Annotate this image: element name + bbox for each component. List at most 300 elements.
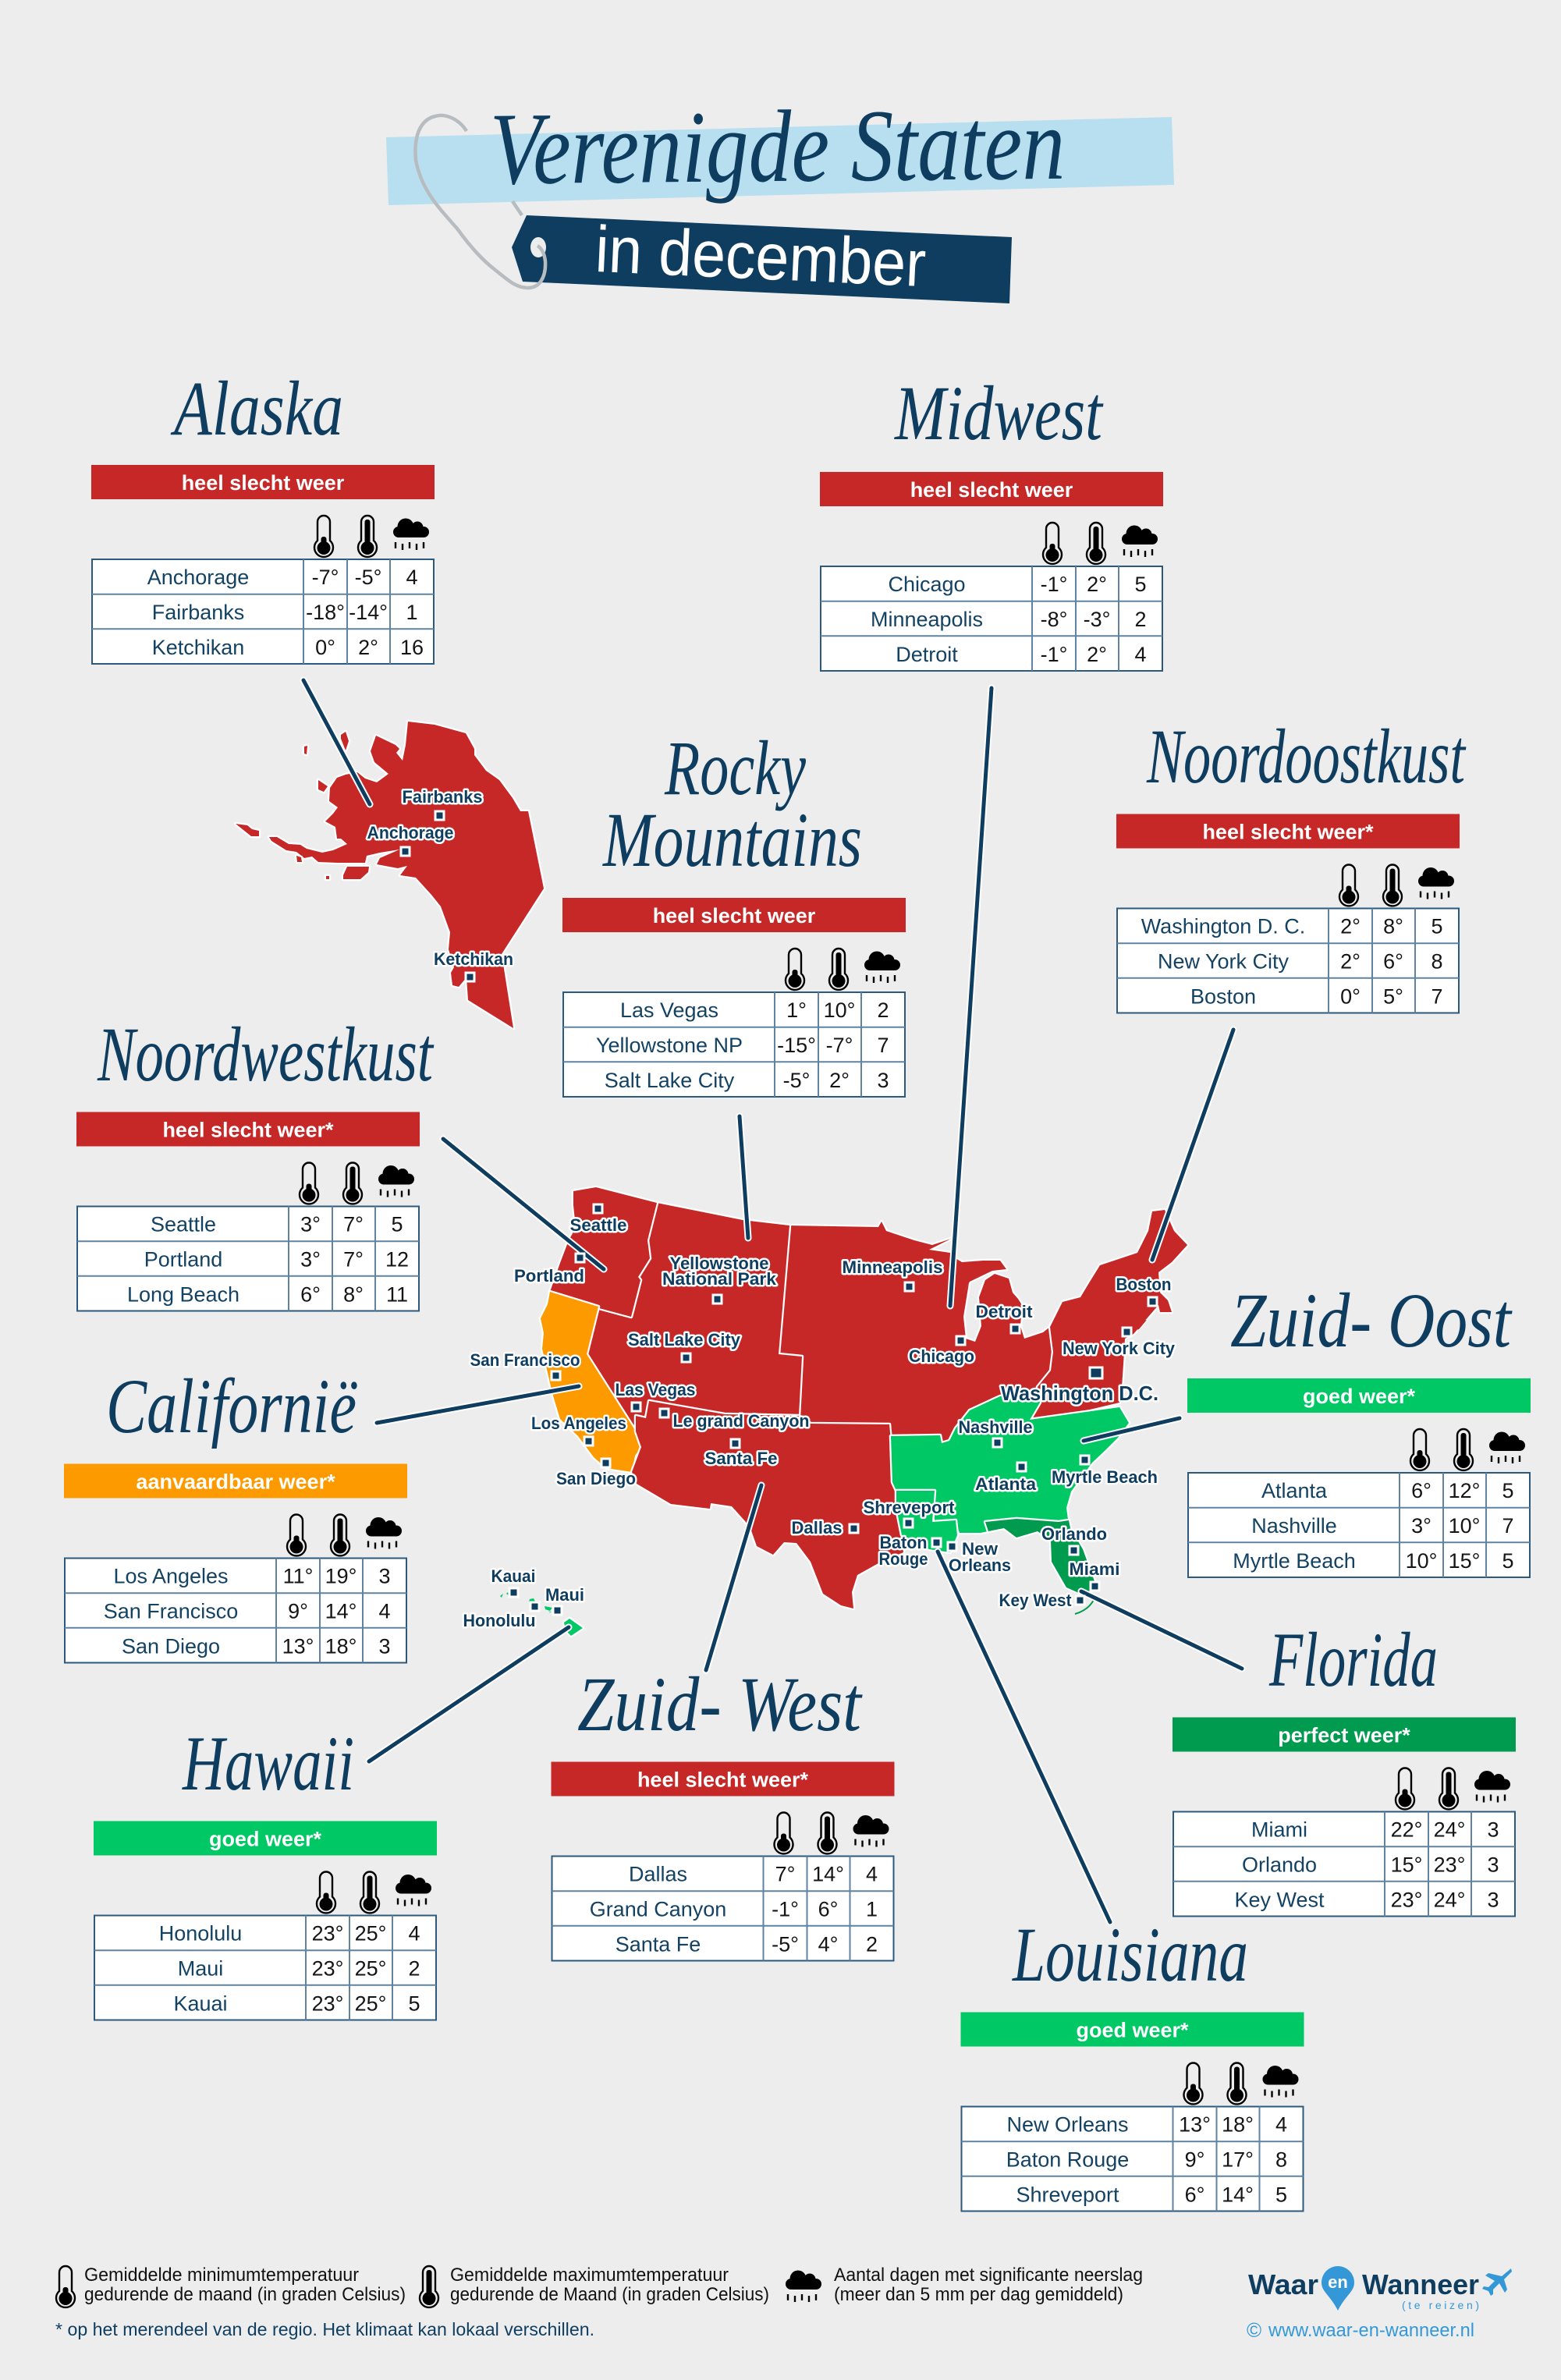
data table: Nashville: [1251, 1514, 1337, 1538]
legend: precipitation: Aantal dagen met significante neerslag: [834, 2265, 1143, 2286]
Alaska mainland: [269, 722, 544, 1028]
data table: 3°: [300, 1212, 321, 1236]
data table: [961, 2106, 1303, 2211]
rating and table: Hawaii: [94, 1821, 437, 2020]
rating bar: goed weer*: [209, 1827, 322, 1850]
rating bar: [961, 2013, 1304, 2047]
logo pin: [1322, 2266, 1354, 2311]
data table: 10°: [824, 998, 855, 1022]
data table: Ketchikan: [152, 636, 244, 659]
data table: Salt Lake City: [605, 1069, 735, 1092]
region: Zuid-West: [632, 1401, 903, 1609]
data table: Los Angeles: [113, 1565, 229, 1588]
data table: 2°: [829, 1069, 850, 1092]
data table: 6°: [300, 1282, 321, 1306]
data table: [563, 992, 905, 1097]
data table: 1: [866, 1897, 878, 1921]
rating bar: heel slecht weer*: [162, 1119, 334, 1142]
data table: 2°: [1340, 914, 1361, 938]
city: Salt Lake City: [628, 1330, 741, 1362]
rating bar: [562, 898, 906, 932]
tag string: [415, 115, 545, 288]
city: Myrtle Beach: [1052, 1456, 1158, 1487]
city: New Orleans: Orleans: [949, 1555, 1011, 1575]
data table: 25°: [355, 1956, 386, 1980]
data table: 15°: [1391, 1853, 1422, 1877]
rating and table: Florida: [1173, 1718, 1516, 1916]
weather icons: [317, 1872, 431, 1913]
city: New Orleans: New: [962, 1539, 999, 1559]
data table: Washington D. C.: [1141, 914, 1305, 938]
data table: 22°: [1391, 1818, 1422, 1841]
data table: Chicago: [888, 573, 966, 596]
data table: 9°: [288, 1599, 308, 1623]
region: Noordwestkust: [550, 1187, 657, 1317]
data table: 1: [406, 601, 418, 624]
rating and table: Rocky Mountains: [562, 898, 906, 1097]
data table: 5: [1502, 1549, 1514, 1573]
heading: Noordwestkust: Noordwestkust: [97, 1011, 435, 1098]
legend: minimum temperature: gedurende de maand (in graden Celsius): [84, 2284, 406, 2305]
map: USA regions: [541, 1187, 1187, 1614]
connector: Alaska: [303, 680, 370, 804]
city: Nashville: [958, 1417, 1033, 1447]
data table: Atlanta: [1261, 1479, 1328, 1502]
city: Boston: Boston: [1116, 1275, 1172, 1294]
data table: 5: [391, 1212, 403, 1236]
logo wordmark: [1248, 2268, 1479, 2300]
data table: 8: [1275, 2148, 1287, 2172]
city: Washington D.C.: [1001, 1367, 1158, 1405]
data table: Seattle: [151, 1212, 216, 1236]
data table: 0°: [315, 636, 335, 659]
region: Florida: [985, 1519, 1094, 1594]
weather icons: [786, 949, 900, 990]
city: San Diego: [556, 1459, 636, 1488]
panel: Rocky Mountains: [562, 725, 906, 1097]
map: Alaska: [236, 722, 544, 1028]
weather icons: [1184, 2063, 1298, 2104]
data table: 9°: [1185, 2148, 1204, 2172]
heading: Zuid-West: Zuid- West: [577, 1661, 863, 1747]
rating bar: [91, 465, 435, 499]
data table: 23°: [312, 1922, 343, 1945]
panel: Louisiana: [961, 1911, 1304, 2211]
data table: Yellowstone NP: [596, 1034, 743, 1057]
data table: [77, 1206, 419, 1311]
city: New Orleans: [948, 1539, 1011, 1575]
data table: 4: [406, 566, 418, 589]
data table: 2°: [1087, 643, 1107, 666]
data table: 7: [1431, 984, 1443, 1008]
city: Detroit: Detroit: [975, 1302, 1033, 1321]
region: Californie: [541, 1292, 641, 1472]
panel: Noordwestkust: [76, 1011, 435, 1311]
city: Atlanta: [975, 1463, 1037, 1494]
subtitle: in december: in december: [594, 212, 928, 300]
legend: minimum temperature: [56, 2265, 406, 2307]
rating bar: [94, 1821, 437, 1855]
data table: 15°: [1449, 1549, 1480, 1573]
city: Salt Lake City: Salt Lake City: [628, 1330, 741, 1350]
heading: Alaska: Alaska: [170, 365, 343, 452]
region: Noordoostkust: [1030, 1210, 1187, 1421]
city: Maui: [545, 1585, 584, 1615]
logo wordmark: Wanneer: [1362, 2268, 1479, 2300]
data table: 24°: [1434, 1888, 1465, 1911]
city: Los Angeles: Los Angeles: [531, 1413, 626, 1433]
city: Miami: [1069, 1559, 1120, 1591]
rating bar: [551, 1761, 894, 1796]
data table: 3°: [1411, 1514, 1432, 1538]
data table: 5: [1275, 2183, 1287, 2206]
rating bar: heel slecht weer: [182, 471, 345, 495]
rating bar: [1187, 1378, 1531, 1413]
city: Las Vegas: [615, 1380, 696, 1411]
data table: Las Vegas: [620, 998, 718, 1022]
rating and table: Alaska: [91, 465, 435, 664]
panel: Zuid-West: [551, 1661, 894, 1961]
weather icons: [1043, 523, 1158, 564]
data table: -5°: [355, 566, 381, 589]
city: Yellowstone National Park: Yellowstone: [669, 1254, 769, 1273]
city: San Francisco: San Francisco: [470, 1350, 580, 1370]
city: Fairbanks: [403, 787, 482, 820]
city: Fairbanks: Fairbanks: [403, 787, 482, 807]
legend: maximum temperature: gedurende de Maand (in graden Celsius): [450, 2284, 769, 2305]
city: Portland: Portland: [514, 1266, 584, 1286]
weather icons: [287, 1515, 402, 1555]
city: Baton Rouge: Baton: [880, 1533, 927, 1552]
city: Kauai: [491, 1566, 535, 1597]
data table: 23°: [312, 1992, 343, 2016]
weather icons: [314, 516, 429, 557]
data table: 6°: [818, 1897, 838, 1921]
city: Nashville: Nashville: [958, 1417, 1033, 1437]
logo: Waar en Wanneer: [1247, 2266, 1512, 2342]
city: Ketchikan: [434, 949, 513, 981]
data table: San Diego: [122, 1635, 220, 1658]
city: San Diego: San Diego: [556, 1469, 636, 1488]
data table: 3: [1487, 1853, 1499, 1877]
city: Myrtle Beach: Myrtle Beach: [1052, 1467, 1158, 1487]
data table: 6°: [1383, 950, 1403, 974]
rating bar: heel slecht weer*: [1202, 821, 1374, 844]
city: Seattle: Seattle: [569, 1215, 627, 1235]
region: Midwest: [779, 1222, 1053, 1441]
data table: 18°: [325, 1635, 357, 1658]
data table: [1188, 1473, 1530, 1577]
city: Minneapolis: [843, 1257, 942, 1291]
data table: 4: [866, 1863, 878, 1886]
city: Shreveport: Shreveport: [863, 1498, 955, 1517]
city: Chicago: Chicago: [909, 1346, 974, 1366]
data table: 2°: [1087, 573, 1107, 596]
title band: [386, 117, 1174, 205]
data table: 7°: [343, 1248, 364, 1272]
data table: -15°: [777, 1034, 816, 1057]
data table: Kauai: [173, 1992, 228, 2016]
city: Santa Fe: [705, 1439, 777, 1468]
data table: 10°: [1406, 1549, 1437, 1573]
data table: 4: [408, 1922, 420, 1945]
data table: 7: [877, 1034, 889, 1057]
legend: precipitation: (meer dan 5 mm per dag gemiddeld): [834, 2284, 1123, 2305]
data table: [65, 1559, 406, 1663]
panel: Florida: [1173, 1616, 1516, 1916]
panel: Noordoostkust: [1116, 713, 1467, 1013]
data table: 17°: [1222, 2148, 1254, 2172]
data table: [92, 559, 434, 664]
data table: 3°: [300, 1248, 321, 1272]
data table: 5°: [1383, 984, 1403, 1008]
data table: 7°: [343, 1212, 364, 1236]
data table: Grand Canyon: [590, 1897, 726, 1921]
panel: Alaska: [91, 365, 435, 664]
data table: -1°: [1041, 573, 1067, 596]
data table: 23°: [312, 1956, 343, 1980]
rating and table: Californie: [64, 1463, 407, 1663]
connector: Noordwestkust: [443, 1139, 604, 1269]
city: Le grand Canyon: Le grand Canyon: [672, 1411, 810, 1431]
weather icons: [1339, 864, 1454, 906]
heading: Rocky Mountains: [601, 725, 862, 883]
data table: 3: [1487, 1888, 1499, 1911]
Florida Keys: [1075, 1600, 1094, 1614]
heading: Hawaii: Hawaii: [182, 1720, 354, 1807]
city: Miami: Miami: [1069, 1559, 1120, 1579]
city: Minneapolis: Minneapolis: [843, 1257, 942, 1277]
rating bar: goed weer*: [1076, 2019, 1189, 2042]
legend: maximum temperature: Gemiddelde maximumtemperatuur: [450, 2265, 729, 2286]
title block: [386, 87, 1174, 303]
data table: Key West: [1234, 1888, 1325, 1911]
panel: Zuid-Oost: [1187, 1277, 1531, 1577]
data table: 24°: [1434, 1818, 1465, 1841]
city: Portland: [514, 1254, 584, 1286]
city: Orlando: [1041, 1524, 1107, 1555]
data table: 5: [1502, 1479, 1514, 1502]
data table: 13°: [1179, 2112, 1211, 2136]
city: Chicago: [909, 1336, 974, 1366]
rating bar: perfect weer*: [1278, 1724, 1410, 1747]
city: New York City: New York City: [1063, 1339, 1176, 1358]
region: Zuid-Oost: [891, 1396, 1129, 1533]
connector: Midwest: [950, 688, 992, 1306]
data table: 3: [877, 1069, 889, 1092]
city: Honolulu: Honolulu: [463, 1611, 535, 1630]
data table: 2: [866, 1933, 878, 1956]
connector: Zuid-Oost: [1084, 1418, 1180, 1441]
connector: Florida: [1081, 1591, 1242, 1669]
data table: 4: [378, 1599, 391, 1623]
weather icons: [1410, 1429, 1525, 1470]
rating bar: [76, 1112, 420, 1147]
data table: 13°: [282, 1635, 314, 1658]
data table: [94, 1916, 436, 2020]
legend: minimum temperature: Gemiddelde minimumtemperatuur: [84, 2265, 359, 2286]
rating bar: heel slecht weer: [653, 904, 816, 928]
city: Las Vegas: Las Vegas: [615, 1380, 696, 1399]
data table: 11°: [283, 1565, 313, 1588]
data table: 12°: [1449, 1479, 1480, 1502]
rating and table: Noordoostkust: [1116, 814, 1460, 1013]
weather icons: [774, 1813, 889, 1853]
data table: Minneapolis: [871, 608, 983, 631]
region: Louisiana: [896, 1491, 957, 1552]
legend: maximum temperature: [420, 2265, 769, 2307]
data table: 19°: [325, 1565, 357, 1588]
tag hole: [530, 237, 546, 257]
city: Atlanta: Atlanta: [975, 1474, 1037, 1494]
data table: 1°: [786, 998, 807, 1022]
data table: 3: [1487, 1818, 1499, 1841]
city: Baton Rouge: [878, 1533, 941, 1569]
website: www.waar-en-wanneer.nl: [1268, 2320, 1474, 2341]
data table: -5°: [783, 1069, 810, 1092]
data table: -3°: [1084, 608, 1110, 631]
data table: 0°: [1340, 984, 1361, 1008]
data table: 18°: [1222, 2112, 1254, 2136]
heading: Florida: Florida: [1268, 1616, 1438, 1703]
city: Shreveport: [863, 1498, 955, 1527]
rating bar: [1116, 814, 1460, 849]
weather icons: [1396, 1768, 1510, 1809]
data table: 2: [408, 1956, 420, 1980]
city: Seattle: [569, 1204, 627, 1235]
data table: 2: [877, 998, 889, 1022]
data table: -5°: [772, 1933, 799, 1956]
logo tagline: (te reizen): [1402, 2299, 1479, 2311]
rating bar: [64, 1463, 407, 1498]
data table: -8°: [1041, 608, 1067, 631]
rating and table: Zuid-West: [551, 1761, 894, 1961]
city: Honolulu: [463, 1602, 539, 1630]
heading: Rocky Mountains: Mountains: [601, 796, 862, 883]
city: Orlando: Orlando: [1041, 1524, 1107, 1544]
data table: 3: [378, 1635, 391, 1658]
city: Dallas: Dallas: [791, 1518, 843, 1538]
rating bar: [820, 472, 1163, 506]
heading: Louisiana: Louisiana: [1011, 1911, 1248, 1998]
heading: Rocky Mountains: Rocky: [664, 725, 806, 811]
heading: Zuid-Oost: Zuid- Oost: [1230, 1277, 1513, 1364]
title: Verenigde Staten: Verenigde Staten: [489, 87, 1066, 206]
Alaska islands: [236, 732, 369, 879]
rating bar: aanvaardbaar weer*: [136, 1470, 335, 1493]
data table: Honolulu: [159, 1922, 242, 1945]
data table: 8°: [1383, 914, 1403, 938]
city: Los Angeles: [531, 1413, 626, 1445]
logo plane: [1482, 2268, 1512, 2296]
data table: -18°: [306, 601, 345, 624]
data table: Detroit: [896, 643, 958, 666]
data table: New York City: [1158, 950, 1290, 974]
data table: Maui: [178, 1956, 223, 1980]
city: Maui: Maui: [545, 1585, 584, 1605]
data table: 5: [1431, 914, 1443, 938]
data table: Baton Rouge: [1006, 2148, 1129, 2172]
data table: 2°: [1340, 950, 1361, 974]
data table: 25°: [355, 1992, 386, 2016]
city: Yellowstone National Park: [662, 1254, 777, 1304]
data table: 23°: [1391, 1888, 1422, 1911]
data table: 12: [385, 1248, 409, 1272]
data table: 7: [1502, 1514, 1514, 1538]
city: Baton Rouge: Rouge: [878, 1549, 928, 1569]
data table: 8: [1431, 950, 1443, 974]
data table: 5: [1134, 573, 1147, 596]
rating bar: [1173, 1718, 1516, 1752]
connector: Louisiana: [938, 1552, 1110, 1922]
city: Washington D.C.: Washington D.C.: [1001, 1382, 1158, 1405]
panel: Hawaii: [94, 1720, 437, 2020]
rating and table: Zuid-Oost: [1187, 1378, 1531, 1577]
panel: Californie: [64, 1363, 407, 1663]
logo pin: en: [1328, 2272, 1348, 2292]
data table: Miami: [1251, 1818, 1307, 1841]
data table: Orlando: [1242, 1853, 1317, 1877]
connector: Californie: [377, 1386, 579, 1423]
rating bar: heel slecht weer*: [637, 1768, 809, 1791]
city: Anchorage: Anchorage: [367, 823, 454, 842]
data table: 6°: [1411, 1479, 1432, 1502]
data table: 4: [1275, 2112, 1287, 2136]
data table: [1173, 1811, 1515, 1916]
data table: Shreveport: [1016, 2183, 1119, 2206]
rating bar: heel slecht weer: [910, 478, 1073, 502]
city: San Francisco: [470, 1350, 580, 1380]
data table: -14°: [349, 601, 388, 624]
data table: 16: [400, 636, 424, 659]
weather icons: [300, 1162, 414, 1204]
city: Kauai: Kauai: [491, 1566, 535, 1586]
map: Hawaii islands: [500, 1592, 583, 1636]
connector: Hawaii: [369, 1627, 569, 1761]
data table: 7°: [775, 1863, 795, 1886]
city: New York City: [1063, 1328, 1176, 1358]
data table: 6°: [1185, 2183, 1204, 2206]
footnote: * op het merendeel van de regio. Het klimaat kan lokaal verschillen.: [55, 2319, 594, 2339]
data table: 4: [1134, 643, 1147, 666]
data table: Long Beach: [127, 1282, 239, 1306]
heading: Californie: Californië: [106, 1363, 357, 1449]
connector: Rocky Mountains: [740, 1116, 748, 1238]
data table: 3: [378, 1565, 391, 1588]
city: Yellowstone National Park: National Park: [662, 1269, 777, 1289]
panel: Midwest: [820, 370, 1163, 671]
data table: Anchorage: [147, 566, 249, 589]
data table: -7°: [312, 566, 339, 589]
connector: Zuid-West: [706, 1485, 761, 1670]
connector: Noordoostkust: [1152, 1030, 1233, 1260]
data table: Dallas: [629, 1863, 687, 1886]
data table: Fairbanks: [152, 601, 244, 624]
data table: Portland: [144, 1248, 222, 1272]
data table: 8°: [343, 1282, 364, 1306]
region: Long Island: [1133, 1320, 1147, 1331]
data table: 5: [408, 1992, 420, 2016]
data table: San Francisco: [104, 1599, 238, 1623]
heading: Midwest: Midwest: [893, 370, 1104, 456]
data table: 10°: [1449, 1514, 1480, 1538]
data table: 11: [386, 1282, 408, 1306]
legend: [55, 2265, 1143, 2339]
data table: New Orleans: [1006, 2112, 1129, 2136]
data table: Boston: [1190, 984, 1256, 1008]
city: Detroit: [975, 1302, 1033, 1333]
data table: 4°: [818, 1933, 838, 1956]
